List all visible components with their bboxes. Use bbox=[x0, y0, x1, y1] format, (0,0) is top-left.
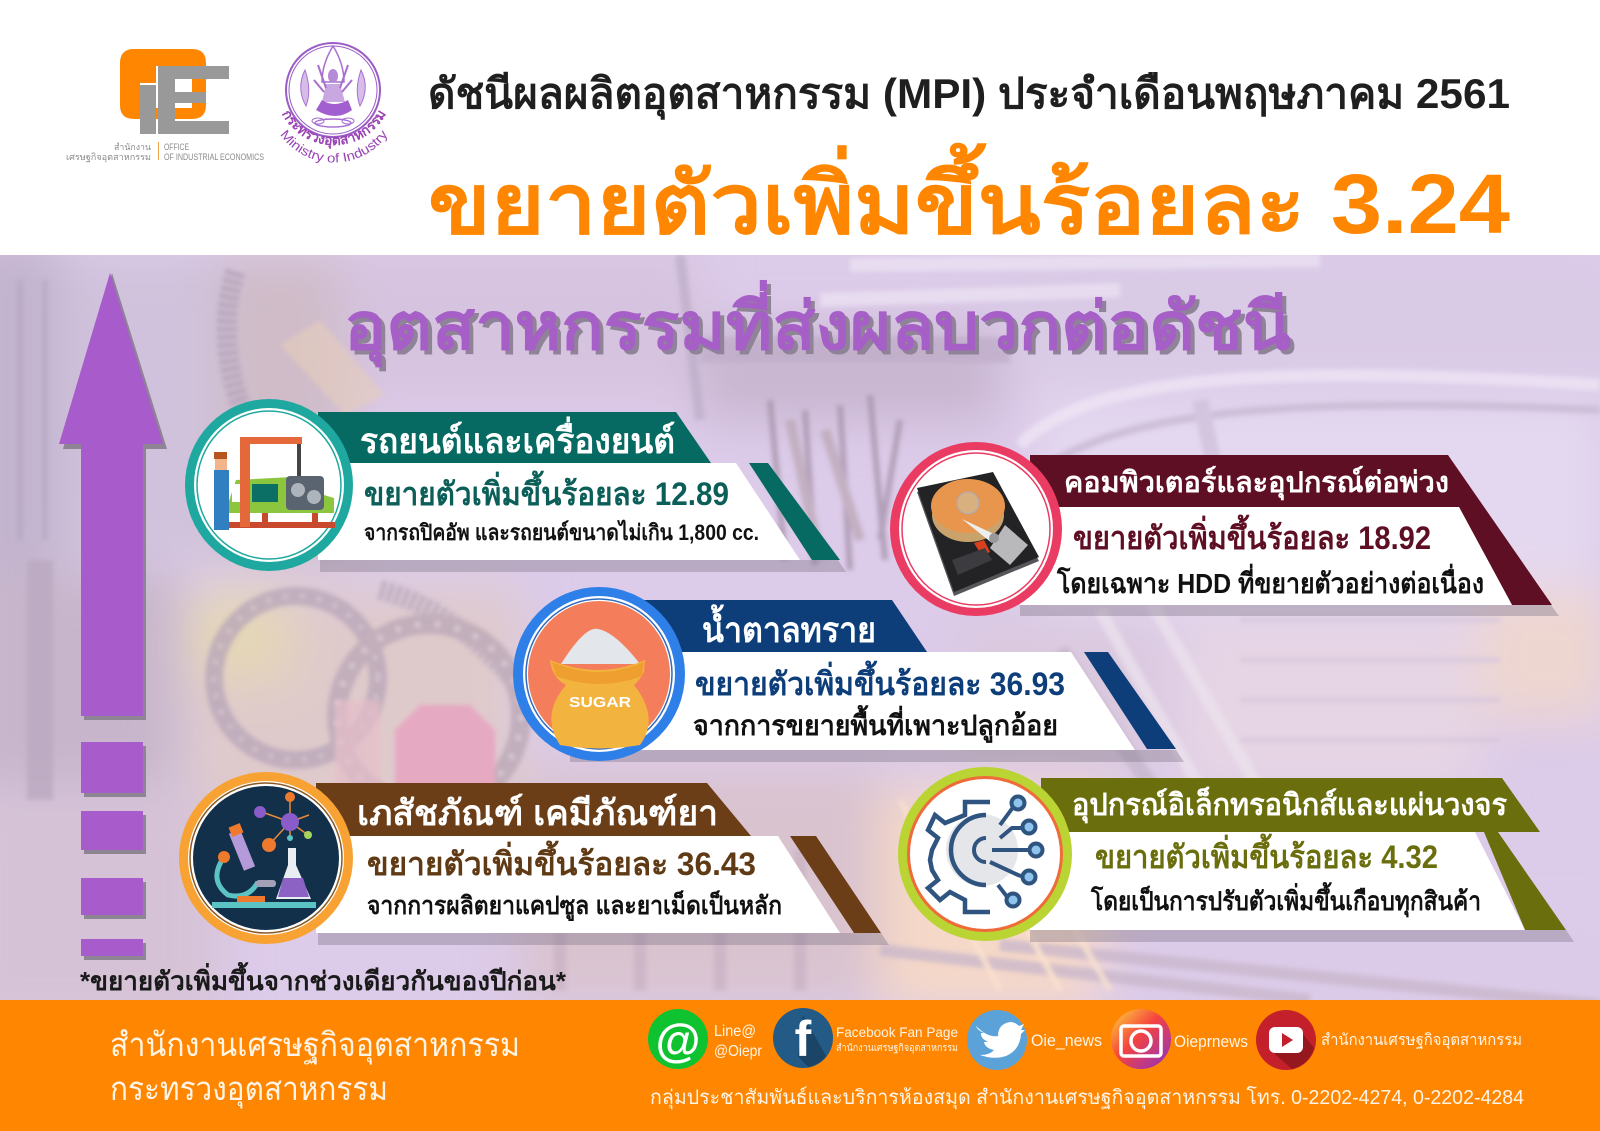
panel: electronics and circuit boards bbox=[898, 767, 1574, 942]
label: Instagram: Oieprnews bbox=[1174, 1032, 1248, 1051]
panel: electronics and circuit boards: ขยายตัวเพิ่มขึ้นร้อยละ 4.32 bbox=[1095, 833, 1438, 875]
header logo: Office of Industrial Economics: OF INDUSTRIAL ECONOMICS bbox=[164, 152, 264, 162]
icon: sugar sack bbox=[513, 587, 685, 761]
panel: pharmaceuticals bbox=[179, 772, 889, 945]
icon: sugar sack: SUGAR bbox=[569, 694, 631, 711]
header logo: Ministry of Industry seal: Ministry of Industry bbox=[280, 130, 388, 163]
panel: computers and peripherals: ขยายตัวเพิ่มขึ้นร้อยละ 18.92 bbox=[1073, 514, 1431, 556]
footnote: *ขยายตัวเพิ่มขึ้นจากช่วงเดียวกันของปีก่อน* bbox=[80, 961, 567, 996]
label: Facebook: สำนักงานเศรษฐกิจอุตสาหกรรม bbox=[836, 1043, 958, 1054]
header logo: Office of Industrial Economics: สำนักงาน bbox=[114, 142, 151, 152]
panel: sugar: จากการขยายพื้นที่เพาะปลูกอ้อย bbox=[693, 704, 1058, 743]
footer organisation name: สำนักงานเศรษฐกิจอุตสาหกรรม bbox=[110, 1026, 520, 1065]
section heading: อุตสาหกรรมที่ส่งผลบวกต่อดัชนี bbox=[344, 279, 1291, 368]
panel: automotive: จากรถปิคอัพ และรถยนต์ขนาดไม่เกิน 1,800 cc. bbox=[364, 519, 759, 545]
panel: automotive bbox=[185, 399, 846, 572]
icon: Line bbox=[648, 1009, 708, 1069]
label: Line bbox=[714, 1023, 763, 1060]
panel: pharmaceuticals: ขยายตัวเพิ่มขึ้นร้อยละ 36.43 bbox=[367, 840, 756, 882]
panel: automotive: รถยนต์และเครื่องยนต์ bbox=[360, 416, 675, 461]
section heading: อุตสาหกรรมที่ส่งผลบวกต่อดัชนี bbox=[348, 283, 1295, 372]
panel: sugar bbox=[513, 587, 1184, 762]
headline: growth 3.24: ขยายตัวเพิ่มขึ้นร้อยละ 3.24 bbox=[428, 142, 1510, 251]
icon: gear and circuit bbox=[898, 767, 1072, 941]
panel: electronics and circuit boards: โดยเป็นการปรับตัวเพิ่มขึ้นเกือบทุกสินค้า bbox=[1090, 881, 1481, 918]
footer organisation name bbox=[110, 1026, 520, 1109]
icon: Instagram bbox=[1111, 1009, 1171, 1069]
footer organisation name: กระทรวงอุตสาหกรรม bbox=[110, 1070, 388, 1109]
label: Twitter: Oie_news bbox=[1031, 1031, 1102, 1050]
contact line: กลุ่มประชาสัมพันธ์และบริการห้องสมุด สำนักงานเศรษฐกิจอุตสาหกรรม โทร. 0-2202-4274, 0-2202-4284 bbox=[650, 1086, 1524, 1110]
header logo: Office of Industrial Economics: เศรษฐกิจอุตสาหกรรม bbox=[66, 152, 151, 163]
panel: electronics and circuit boards: อุปกรณ์อิเล็กทรอนิกส์และแผ่นวงจร bbox=[1072, 786, 1507, 824]
icon: Facebook: f bbox=[795, 1011, 812, 1067]
label: Facebook: Facebook Fan Page bbox=[836, 1024, 958, 1040]
background: faded factory photo bbox=[0, 240, 1600, 1020]
header logo: Office of Industrial Economics bbox=[66, 49, 264, 163]
title: MPI May 2561: ดัชนีผลผลิตอุตสาหกรรม (MPI) ประจำเดือนพฤษภาคม 2561 bbox=[428, 70, 1510, 120]
arrow: upward trend bbox=[59, 273, 167, 960]
icon: Facebook bbox=[773, 1008, 833, 1068]
panel: computers and peripherals: คอมพิวเตอร์และอุปกรณ์ต่อพ่วง bbox=[1064, 465, 1449, 500]
panel: sugar: น้ำตาลทราย bbox=[702, 604, 876, 650]
icon: lab science bbox=[179, 772, 353, 944]
label: YouTube: สำนักงานเศรษฐกิจอุตสาหกรรม bbox=[1321, 1032, 1522, 1050]
label: Line: Line@ bbox=[714, 1023, 756, 1040]
header logo: Ministry of Industry seal: กระทรวงอุตสาหกรรม bbox=[282, 110, 386, 149]
panel: pharmaceuticals: เภสัชภัณฑ์ เคมีภัณฑ์ยา bbox=[357, 793, 718, 833]
icon: hard disk bbox=[890, 442, 1062, 616]
icon: Line: @ bbox=[656, 1014, 700, 1066]
panel: sugar: ขยายตัวเพิ่มขึ้นร้อยละ 36.93 bbox=[695, 660, 1065, 702]
panel: pharmaceuticals: จากการผลิตยาแคปซูล และยาเม็ดเป็นหลัก bbox=[367, 890, 782, 922]
label: Facebook bbox=[836, 1024, 958, 1054]
footer band bbox=[0, 1000, 1600, 1131]
panel: computers and peripherals bbox=[890, 442, 1559, 616]
header logo: Ministry of Industry seal bbox=[280, 42, 388, 163]
label: Line: @Oiepr bbox=[714, 1043, 763, 1060]
panel: computers and peripherals: โดยเฉพาะ HDD ที่ขยายตัวอย่างต่อเนื่อง bbox=[1056, 563, 1484, 599]
icon: car assembly bbox=[185, 399, 353, 571]
icon: Twitter bbox=[967, 1010, 1027, 1070]
header logo: Office of Industrial Economics: OFFICE bbox=[164, 142, 189, 152]
icon: YouTube bbox=[1256, 1010, 1316, 1070]
panel: automotive: ขยายตัวเพิ่มขึ้นร้อยละ 12.89 bbox=[364, 470, 729, 512]
